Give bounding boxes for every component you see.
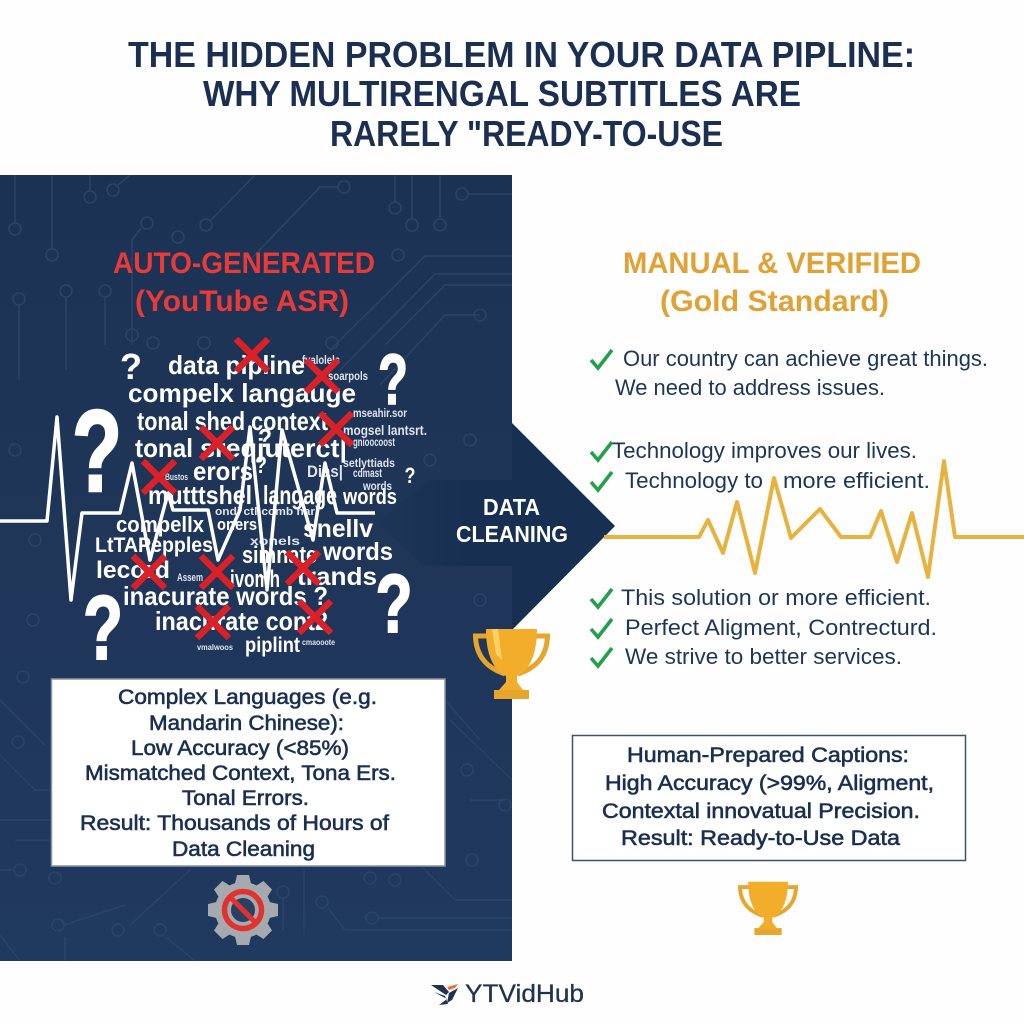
- word cloud: garbled captions: inacurate cont2: [155, 606, 328, 636]
- word cloud: garbled captions: lecord: [96, 557, 170, 584]
- icon: broken gear: [208, 875, 278, 945]
- logo: YTVidHub: YTVidHub: [465, 980, 584, 1008]
- word cloud: garbled captions: cmaooote: [302, 638, 335, 647]
- callout: complex languages: Complex Languages (e.g.: [118, 685, 377, 709]
- checklist: lower: Perfect Aligment, Contrecturd.: [625, 615, 937, 640]
- title: [128, 34, 915, 154]
- arrow: data cleaning: CLEANING: [456, 521, 568, 547]
- red x marks: [133, 339, 352, 638]
- question marks: ?: [255, 452, 267, 479]
- word cloud: garbled captions: gnioocoost: [353, 435, 395, 449]
- word cloud: garbled captions: words: [322, 538, 393, 566]
- checklist: upper: [591, 346, 988, 493]
- checklist: lower: We strive to better services.: [625, 644, 902, 669]
- word cloud: garbled captions: compellx: [116, 512, 205, 537]
- title: WHY MULTIRENGAL SUBTITLES ARE: [203, 73, 801, 114]
- word cloud: garbled captions: ivomh: [230, 566, 280, 593]
- word cloud: garbled captions: sreqjuterct|: [200, 433, 347, 463]
- question marks: ?: [258, 423, 272, 453]
- word cloud: garbled captions: langage: [263, 480, 337, 510]
- word cloud: garbled captions: cdmast: [353, 466, 382, 480]
- heading: manual and verified: [623, 247, 921, 318]
- title: RARELY "READY-TO-USE: [330, 113, 723, 154]
- question marks: ?: [72, 386, 122, 516]
- checklist: upper: Our country can achieve great things.: [623, 346, 988, 371]
- callout: complex languages: Mandarin Chinese):: [149, 711, 344, 735]
- word cloud: garbled captions: mutttshel: [148, 480, 252, 510]
- arrow: data cleaning: [377, 423, 615, 630]
- word cloud: garbled captions: words: [342, 484, 397, 509]
- heading: auto-generated: [113, 247, 375, 318]
- question marks: [72, 341, 416, 679]
- callout: human-prepared captions: Contextal innovatual Precision.: [602, 799, 920, 823]
- question marks: ?: [376, 557, 412, 650]
- word cloud: garbled captions: Bustos: [165, 472, 188, 482]
- icon: trophy on arrow: [476, 629, 548, 699]
- word cloud: garbled captions: piplint: [245, 634, 300, 657]
- heartbeat line: noisy: [0, 417, 375, 600]
- word cloud: garbled captions: [95, 350, 427, 657]
- callout: complex languages: Mismatched Context, Tona Ers.: [85, 761, 396, 785]
- word cloud: garbled captions: vmalwoos: [197, 643, 234, 652]
- word cloud: garbled captions: Dias|: [307, 462, 343, 481]
- callout: human-prepared captions: [572, 736, 966, 860]
- checklist: lower: [591, 585, 937, 669]
- word cloud: garbled captions: snellv: [303, 515, 373, 543]
- title: THE HIDDEN PROBLEM IN YOUR DATA PIPLINE:: [128, 34, 915, 75]
- callout: complex languages: Result: Thousands of Hours of: [80, 811, 389, 835]
- word cloud: garbled captions: fvalolels: [302, 353, 340, 367]
- word cloud: garbled captions: ondi ctl-comb nar: [215, 506, 316, 518]
- checklist: upper: more efficient.: [783, 468, 930, 493]
- word cloud: garbled captions: tonal shed context: [137, 406, 328, 436]
- word cloud: garbled captions: soarpols: [328, 369, 368, 383]
- arrow: data cleaning: DATA: [483, 494, 540, 520]
- panel: auto-generated: [0, 175, 512, 965]
- heartbeat line: clean: [604, 461, 1024, 577]
- callout: complex languages: Low Accuracy (<85%): [131, 736, 349, 760]
- callout: complex languages: Data Cleaning: [172, 837, 315, 861]
- callout: human-prepared captions: Result: Ready-to-Use Data: [621, 826, 900, 850]
- heading: manual and verified: MANUAL & VERIFIED: [623, 247, 921, 280]
- checklist: upper: We need to address issues.: [615, 375, 885, 400]
- heading: auto-generated: AUTO-GENERATED: [113, 247, 375, 280]
- word cloud: garbled captions: erors: [193, 456, 253, 486]
- word cloud: garbled captions: tonal: [135, 433, 193, 463]
- callout: complex languages: Tonal Errors.: [182, 786, 309, 810]
- heading: manual and verified: (Gold Standard): [660, 285, 889, 318]
- word cloud: garbled captions: setlyttiads: [343, 456, 395, 470]
- callout: complex languages: [52, 679, 445, 866]
- word cloud: garbled captions: compelx langauge: [128, 378, 356, 408]
- checklist: upper: Technology to: [625, 468, 763, 493]
- icon: trophy lower right: [740, 882, 796, 935]
- word cloud: garbled captions: Assem: [177, 572, 203, 584]
- question marks: ?: [83, 578, 123, 679]
- checklist: lower: This solution or more efficient.: [621, 585, 931, 610]
- word cloud: garbled captions: trands: [297, 563, 377, 591]
- word cloud: garbled captions: oners: [217, 515, 257, 534]
- word cloud: garbled captions: xonels: [250, 534, 300, 548]
- heading: auto-generated: (YouTube ASR): [135, 285, 349, 318]
- word cloud: garbled captions: simnate: [242, 542, 317, 569]
- checklist: upper: Technology improves our lives.: [612, 438, 917, 463]
- callout: human-prepared captions: High Accuracy (>99%, Aligment,: [605, 771, 934, 795]
- word cloud: garbled captions: inacurate words ?: [123, 581, 328, 611]
- word cloud: garbled captions: data pipline: [168, 350, 305, 380]
- question marks: ?: [120, 346, 142, 387]
- word cloud: garbled captions: LtTAPepples: [95, 534, 213, 557]
- question marks: ?: [404, 463, 416, 488]
- word cloud: garbled captions: mogsel lantsrt.: [343, 422, 427, 438]
- word cloud: garbled captions: words: [362, 479, 392, 493]
- callout: human-prepared captions: Human-Prepared Captions:: [627, 743, 909, 767]
- word cloud: garbled captions: mseahir.sor: [353, 406, 407, 420]
- question marks: ?: [378, 341, 408, 420]
